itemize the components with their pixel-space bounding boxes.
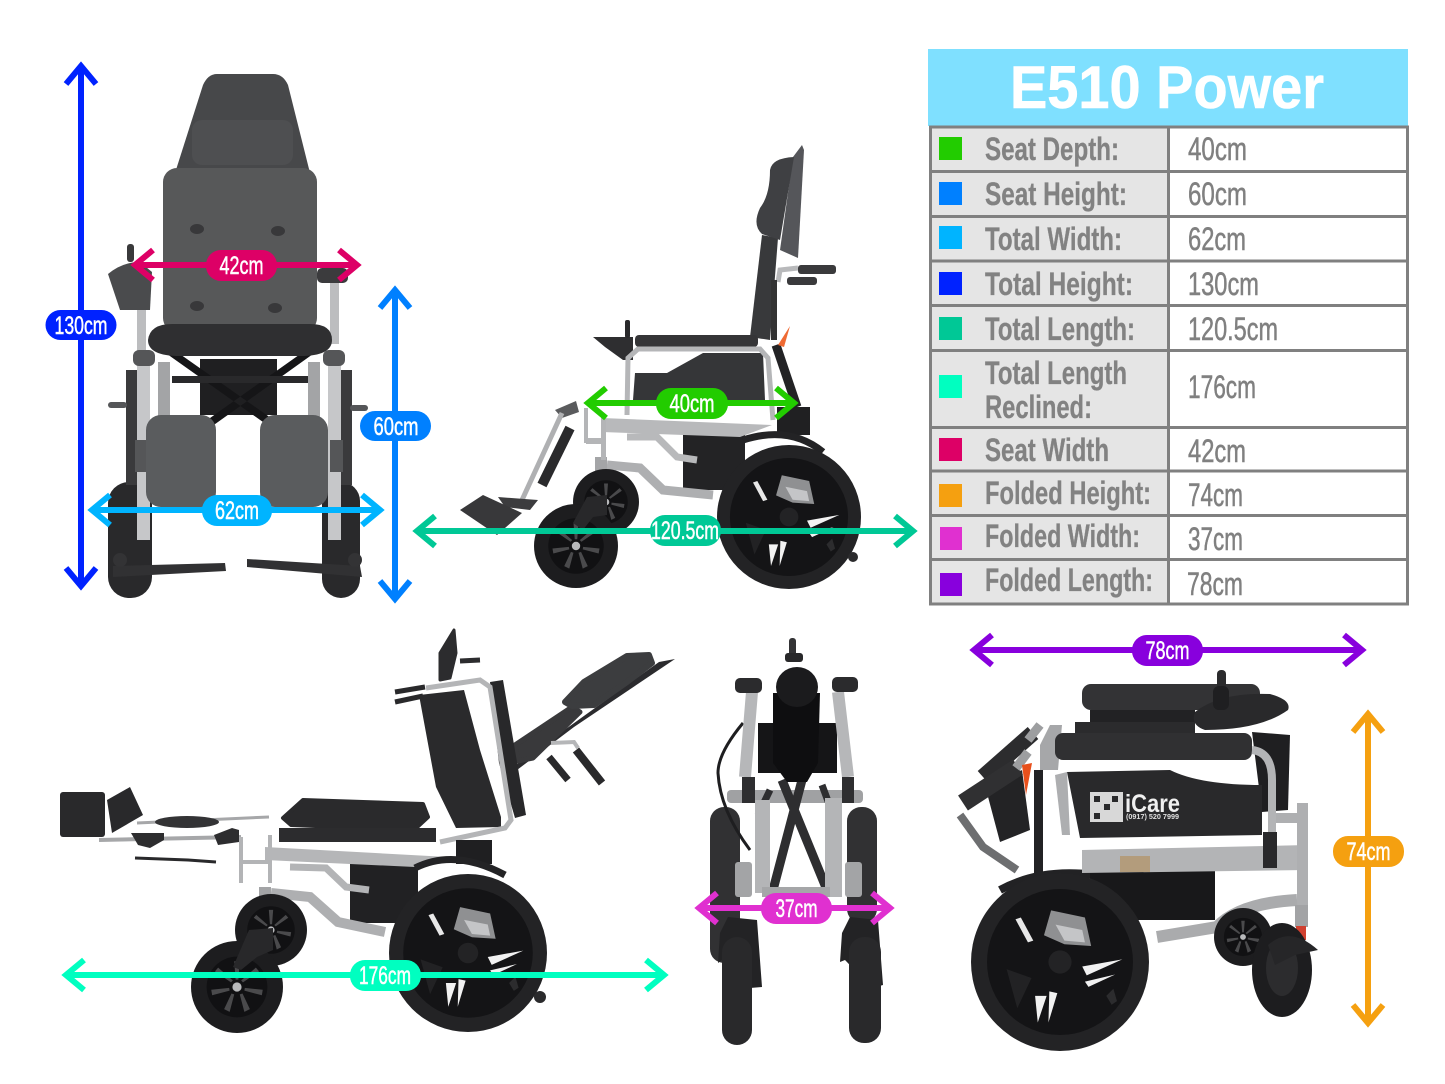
seat <box>283 800 428 830</box>
table header <box>928 49 1408 126</box>
wheels <box>235 894 307 966</box>
arrow: total width 62cm: 62cm <box>215 497 259 525</box>
headrest and back <box>175 74 310 173</box>
row: total width: 62cm <box>1188 221 1246 257</box>
side panel with branding: (0917) 520 7999 <box>1126 814 1179 821</box>
reclined headrest <box>565 655 652 706</box>
seat <box>148 324 332 356</box>
push handles <box>778 268 798 282</box>
controller <box>593 337 633 360</box>
main beam <box>602 418 772 437</box>
row: seat width: Seat Width <box>985 432 1109 468</box>
crossed frame <box>773 780 827 890</box>
foot plates <box>113 563 226 577</box>
back panel <box>419 690 501 828</box>
controller <box>108 262 152 310</box>
row: total width: Total Width: <box>985 221 1122 257</box>
leg column <box>584 408 606 460</box>
panel: specification table <box>928 49 1408 604</box>
brackets <box>742 777 755 803</box>
arrow: total length reclined 176cm: 176cm <box>359 962 411 990</box>
grey pads <box>727 790 863 803</box>
arrow: seat height 60cm: 60cm <box>374 413 418 441</box>
controller <box>440 630 456 680</box>
main wheel <box>971 873 1149 1051</box>
arrow: seat width 42cm <box>135 250 357 281</box>
arrow: folded length 78cm: 78cm <box>1146 637 1190 665</box>
seat <box>635 335 758 347</box>
wavy side panel <box>633 353 765 400</box>
arrow: seat width 42cm: 42cm <box>220 252 264 280</box>
motor area <box>683 433 745 490</box>
motor area <box>350 863 418 923</box>
back cushion <box>750 235 778 340</box>
row: total length reclined <box>939 355 1256 425</box>
silver arm tubes <box>745 692 848 777</box>
panel: folded side view <box>960 670 1318 1051</box>
frame column <box>239 835 272 883</box>
row: total height <box>939 266 1259 302</box>
wheels <box>573 469 639 535</box>
arrow: total length 120.5cm: 120.5cm <box>651 517 719 545</box>
lower frame <box>627 437 697 460</box>
reclined cushion <box>515 707 580 761</box>
arrow: folded length 78cm <box>974 635 1362 666</box>
rear panel <box>1252 732 1290 812</box>
small wheels <box>1214 908 1272 966</box>
arrow: folded height 74cm <box>1333 714 1404 1023</box>
cable <box>718 723 750 850</box>
row: seat height <box>939 176 1247 212</box>
arm frame <box>627 349 773 420</box>
controller <box>1194 694 1289 730</box>
row: folded height: 74cm <box>1188 477 1243 513</box>
row: total height: 130cm <box>1188 266 1259 302</box>
row: total length reclined: Total Length <box>985 355 1127 391</box>
arrow: total width 62cm <box>92 495 380 526</box>
frame tubes <box>137 362 341 540</box>
arrow: total length reclined 176cm <box>66 960 664 991</box>
row: seat height: Seat Height: <box>985 176 1127 212</box>
row: folded height <box>939 475 1243 513</box>
black centre <box>758 723 837 773</box>
arrow: total length 120.5cm <box>417 515 913 546</box>
arm rests <box>735 678 762 693</box>
rear frame <box>1082 845 1308 873</box>
arrow: total height 130cm <box>46 66 116 586</box>
reclined plate <box>513 659 675 770</box>
row: folded width: 37cm <box>1188 521 1243 557</box>
table header: E510 Power <box>1010 54 1324 121</box>
row: total length reclined: 176cm <box>1188 369 1256 405</box>
arrow: folded width 37cm: 37cm <box>776 895 818 923</box>
main beam <box>265 847 448 867</box>
front handles <box>395 687 425 702</box>
row: folded length: Folded Length: <box>985 562 1153 598</box>
folded pouch <box>987 770 1030 842</box>
rear wheels <box>108 370 360 598</box>
controller shield <box>773 693 820 782</box>
row: total length: 120.5cm <box>1188 311 1278 347</box>
rear tyres <box>710 807 740 963</box>
arrow: folded height 74cm: 74cm <box>1346 838 1390 866</box>
leg rest <box>555 401 579 418</box>
row: seat depth <box>939 131 1247 167</box>
rear strut and orange lever <box>776 345 797 407</box>
row: total height: Total Height: <box>985 266 1133 302</box>
rear handles <box>551 742 578 748</box>
strut <box>1034 770 1043 885</box>
joystick <box>789 638 796 658</box>
row: seat height: 60cm <box>1188 176 1247 212</box>
front wheels <box>722 937 752 1045</box>
lower arm rest <box>1055 733 1252 760</box>
row: total length reclined: Reclined: <box>985 389 1092 425</box>
row: folded width: Folded Width: <box>985 518 1140 554</box>
arrow: seat depth 40cm: 40cm <box>670 390 714 418</box>
row: seat depth: Seat Depth: <box>985 131 1119 167</box>
motor block <box>1090 865 1215 920</box>
arm tube <box>426 680 511 842</box>
panel: reclined wheelchair <box>60 630 675 1033</box>
row: folded width <box>940 518 1243 557</box>
arrow: folded width 37cm <box>699 893 890 924</box>
panel: side view wheelchair <box>460 145 861 589</box>
foot plates <box>60 792 105 837</box>
folded handles <box>983 733 1033 777</box>
under seat frame <box>200 359 277 415</box>
back plate <box>780 145 804 258</box>
row: total length <box>939 311 1278 347</box>
side panel with branding <box>1055 770 1262 838</box>
arrow: seat depth 40cm <box>588 388 794 419</box>
row: total width <box>939 221 1246 257</box>
forks <box>718 917 762 988</box>
leg tubes <box>137 817 269 823</box>
upper arm rest <box>1082 684 1260 710</box>
headrest <box>756 157 794 240</box>
foot plates <box>498 497 538 510</box>
row: total length: Total Length: <box>985 311 1135 347</box>
panel: folded front view <box>710 638 883 1045</box>
silver legs <box>755 800 770 893</box>
arm posts <box>137 282 339 352</box>
row: seat depth: 40cm <box>1188 131 1247 167</box>
leg pads <box>146 415 216 507</box>
side panel with branding: iCare <box>1125 790 1180 818</box>
row: seat width <box>939 432 1246 469</box>
table grid <box>930 127 1408 604</box>
row: seat width: 42cm <box>1188 433 1246 469</box>
row: folded length <box>940 562 1243 602</box>
lower frame <box>290 867 369 890</box>
arrow: seat height 60cm <box>360 290 431 599</box>
row: folded length: 78cm <box>1187 566 1243 602</box>
side pad <box>490 680 526 818</box>
fender <box>1000 873 1095 890</box>
row: folded height: Folded Height: <box>985 475 1151 511</box>
arrow: total height 130cm: 130cm <box>54 312 108 340</box>
panel: front view wheelchair <box>108 74 368 598</box>
